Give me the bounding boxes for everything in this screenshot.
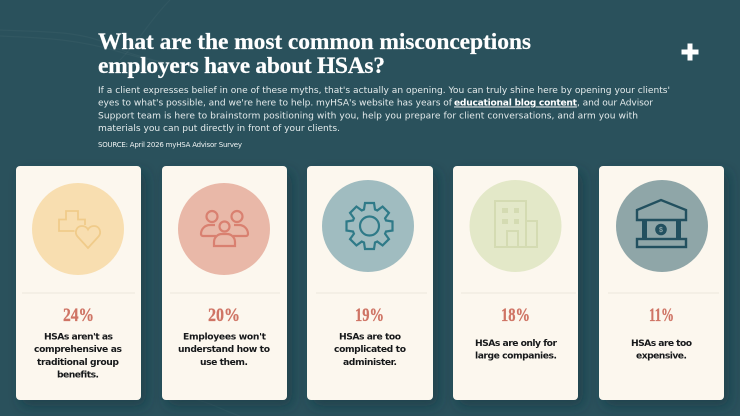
description: understand how to — [178, 344, 270, 355]
icon: cross and heart in yellow circle — [32, 183, 124, 275]
panel: card 11% — [599, 166, 724, 400]
icon: bank in slate circle: $ — [659, 227, 663, 234]
description — [34, 332, 123, 380]
description: Employees won't — [183, 332, 267, 342]
icon: people in salmon circle — [178, 183, 270, 275]
icon: building in green circle — [470, 180, 562, 272]
panel: card 20% — [162, 166, 287, 400]
panel: card 18% — [453, 166, 578, 400]
panel: card 24% — [16, 166, 141, 400]
title: What are the most common misconceptions — [98, 29, 531, 55]
description: large companies. — [475, 351, 557, 362]
intro text block: If a client expresses belief in one of these myths, that's actually an opening. You can truly shine here by opening your clients' — [98, 86, 670, 96]
intro text block: materials you can put directly in front of your clients. — [98, 124, 340, 134]
description — [631, 338, 692, 362]
icon: white plus — [682, 44, 698, 60]
intro text block: educational blog content — [454, 98, 578, 108]
intro text block — [98, 86, 670, 134]
icon: bank in slate circle — [616, 180, 708, 272]
description: use them. — [200, 357, 248, 368]
percentage: 19% — [355, 305, 384, 326]
description: expensive. — [636, 351, 687, 362]
icon: gear in blue circle — [322, 180, 414, 272]
panel: card 19% — [307, 166, 433, 400]
source note: SOURCE: April 2026 myHSA Advisor Survey — [98, 141, 242, 149]
percentage: 11% — [649, 305, 674, 326]
percentage: 20% — [208, 305, 240, 326]
description: traditional group — [37, 357, 119, 368]
description: complicated to — [334, 344, 406, 355]
percentage: 24% — [63, 305, 94, 326]
description: administer. — [343, 357, 397, 368]
title: employers have about HSAs? — [98, 53, 385, 79]
percentage: 18% — [501, 305, 530, 326]
description: HSAs are only for — [475, 338, 557, 349]
description: HSAs are too — [339, 332, 401, 342]
intro text block: eyes to what's possible, and we're here to help. myHSA's website has years of — [98, 98, 453, 108]
title — [98, 29, 531, 79]
description — [475, 338, 557, 362]
description: comprehensive as — [34, 344, 123, 355]
description — [334, 332, 406, 368]
description: benefits. — [57, 370, 99, 380]
description: HSAs aren't as — [44, 332, 114, 342]
description — [178, 332, 270, 368]
intro text block: Support team is here to brainstorm positioning with you, help you prepare for client conversations, and arm you with — [98, 112, 638, 122]
description: HSAs are too — [631, 338, 692, 349]
intro text block: , and our Advisor — [577, 98, 653, 108]
